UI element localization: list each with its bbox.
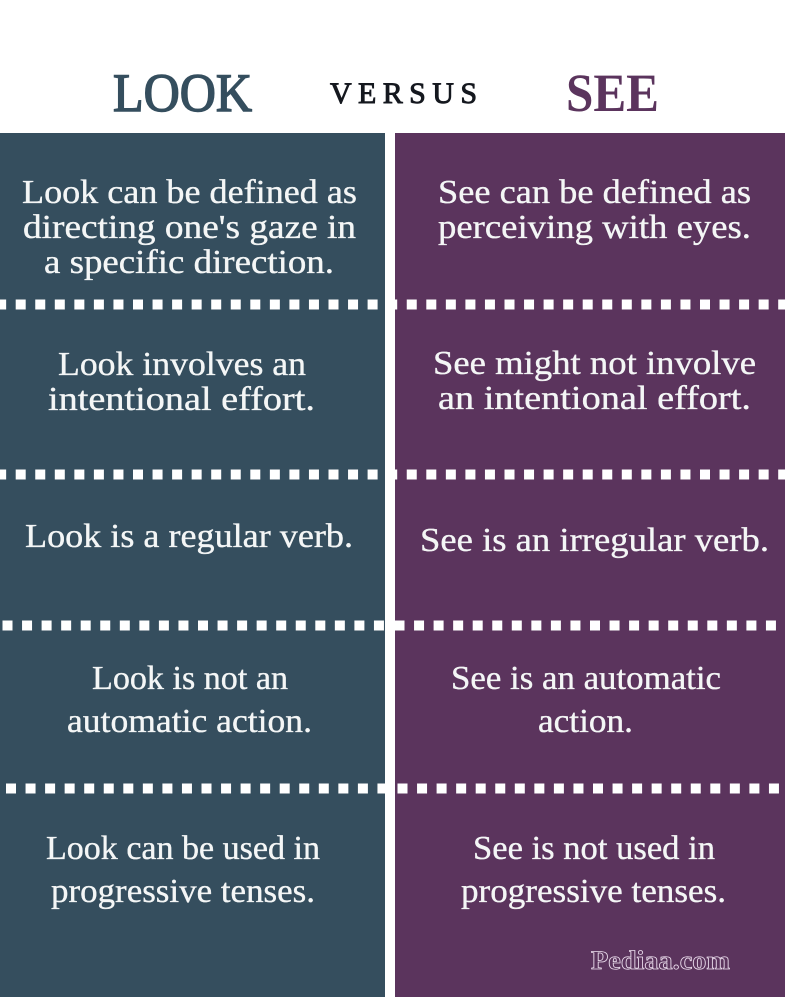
text: look definition: a specific direction. <box>44 244 334 281</box>
text: see tenses: progressive tenses. <box>461 873 726 910</box>
text: look tenses <box>46 830 320 910</box>
text: see tenses: See is not used in <box>473 830 715 867</box>
text: look verb type: Look is a regular verb. <box>25 518 353 555</box>
text: look definition <box>22 174 357 281</box>
text: look action: Look is not an <box>92 660 288 697</box>
text: see tenses <box>461 830 726 910</box>
heading: SEE: SEE <box>566 63 659 123</box>
text: see definition: See can be defined as <box>438 174 751 211</box>
text: see definition: perceiving with eyes. <box>438 209 751 246</box>
text: see effort <box>433 345 756 417</box>
text: look action: automatic action. <box>67 703 312 740</box>
text: see definition <box>438 174 751 246</box>
text: see verb type: See is an irregular verb. <box>420 522 769 559</box>
panel: see column <box>395 133 785 997</box>
header: look versus see <box>113 63 659 123</box>
text: look definition: directing one's gaze in <box>23 209 356 246</box>
panel: look column <box>0 133 385 997</box>
text: look effort: intentional effort. <box>48 381 315 418</box>
text: see action: action. <box>538 703 633 740</box>
logo: Pediaa.com: Pediaa.com <box>591 946 730 975</box>
text: look effort <box>48 346 315 418</box>
text: see action <box>451 660 721 740</box>
heading: VERSUS: VERSUS <box>330 77 477 110</box>
text: look effort: Look involves an <box>58 346 306 383</box>
text: look action <box>67 660 312 740</box>
text: look tenses: progressive tenses. <box>51 873 315 910</box>
column background: look <box>0 133 385 997</box>
text: look definition: Look can be defined as <box>22 174 357 211</box>
text: see effort: See might not involve <box>433 345 756 382</box>
heading: LOOK: LOOK <box>113 63 252 123</box>
column background: see <box>395 133 785 997</box>
text: see action: See is an automatic <box>451 660 721 697</box>
text: look tenses: Look can be used in <box>46 830 320 867</box>
text: see effort: an intentional effort. <box>438 380 751 417</box>
